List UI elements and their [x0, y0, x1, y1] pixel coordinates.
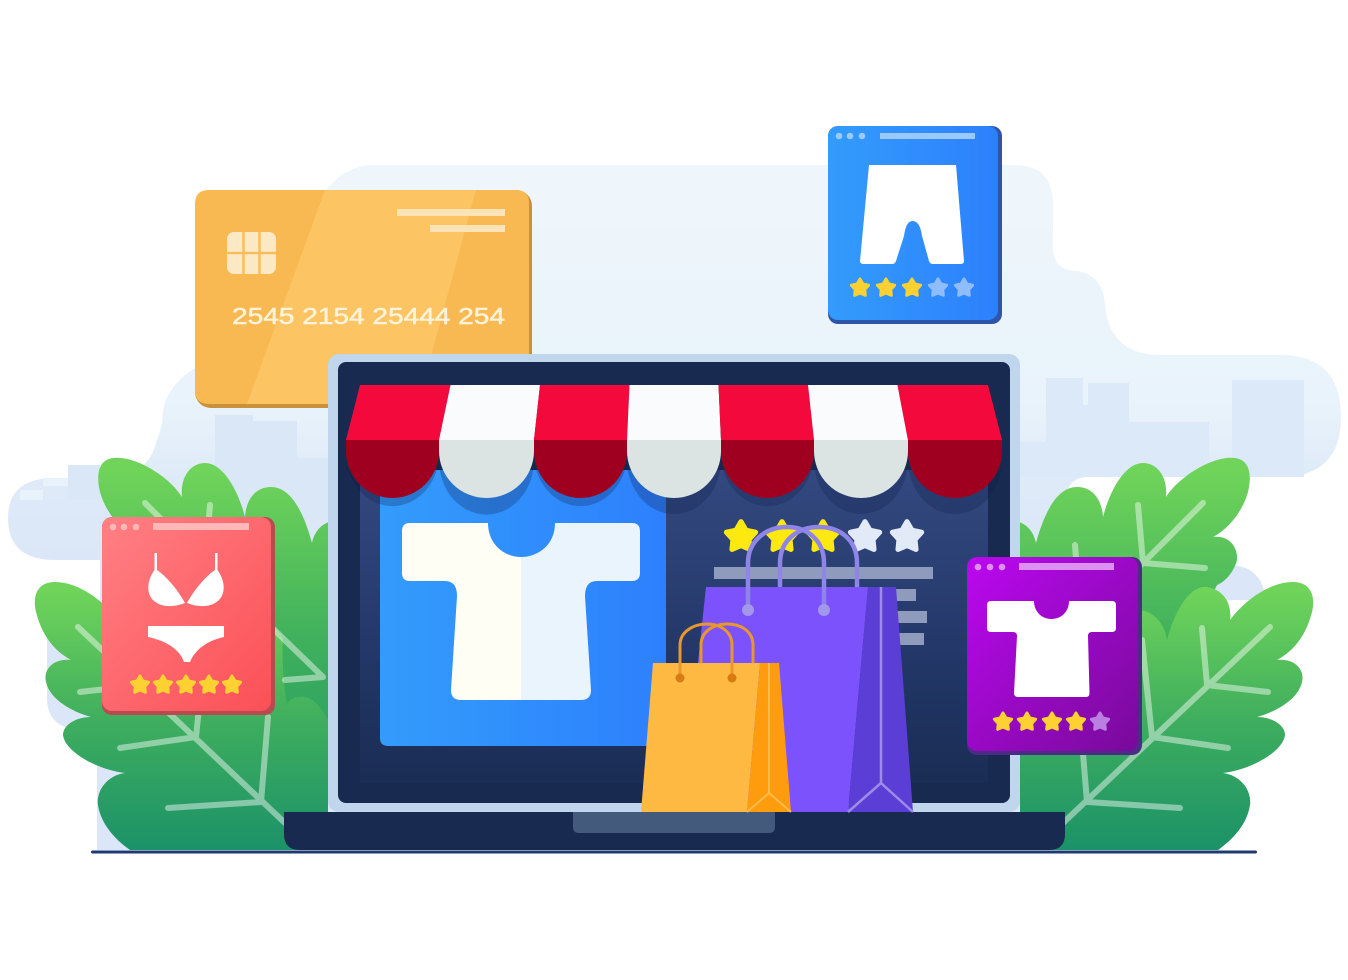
front handle [742, 527, 830, 616]
awning [346, 385, 1002, 498]
laptop lid [328, 354, 1020, 812]
t-shirt icon [987, 601, 1116, 697]
right plant [1019, 458, 1313, 850]
bag front [682, 587, 868, 812]
bikini bottom icon [148, 626, 224, 662]
left plant [35, 458, 329, 850]
browser bar [110, 523, 249, 530]
shorts icon [860, 165, 964, 264]
card body [967, 557, 1142, 755]
browser bar [836, 133, 975, 139]
credit card [195, 190, 532, 408]
front leaf left [35, 582, 328, 850]
front handle [676, 624, 736, 682]
rating stars [994, 713, 1109, 729]
laptop base [284, 812, 1065, 850]
back leaf left [98, 458, 329, 720]
bag side [747, 663, 791, 812]
card lines [397, 209, 505, 232]
blue product card: shorts [828, 126, 1002, 324]
trackpad notch [573, 812, 775, 833]
card face [195, 190, 529, 404]
background cloud [8, 165, 1341, 850]
front leaf [1020, 582, 1313, 850]
screen rating stars [726, 522, 922, 549]
card number: 2545 2154 25444 254 [232, 303, 505, 329]
back handle [701, 624, 753, 663]
bag fold line [848, 587, 913, 812]
infographic: online shop illustration [8, 126, 1341, 854]
rating stars [851, 279, 973, 295]
left skyline highlight [20, 478, 68, 500]
card body [102, 517, 275, 715]
purple product card: t-shirt [967, 557, 1142, 755]
orange shopping bag [641, 624, 791, 812]
card edge [195, 190, 532, 408]
back handle [780, 527, 857, 590]
leaf veins [1025, 503, 1270, 823]
ground line [91, 850, 1257, 854]
browser bar [975, 563, 1114, 570]
red product card: bikini [102, 517, 275, 715]
leaf veins left [78, 503, 323, 823]
awning shadow [360, 470, 988, 515]
card highlight [247, 190, 476, 404]
purple shopping bag [682, 527, 913, 812]
bikini top icon [148, 553, 224, 606]
laptop screen [338, 362, 1010, 803]
bag side [848, 587, 913, 812]
t-shirt [402, 523, 640, 700]
card body [828, 126, 1002, 324]
left city skyline [68, 415, 330, 520]
right city skyline [1020, 378, 1304, 477]
storefront wall [360, 470, 988, 783]
back leaf [1019, 458, 1250, 720]
product panel [380, 470, 666, 746]
rating stars [131, 676, 241, 692]
product text bars [714, 567, 933, 645]
laptop [284, 354, 1065, 850]
bag fold line [747, 663, 791, 812]
card chip [227, 232, 276, 274]
bag front [641, 663, 760, 812]
